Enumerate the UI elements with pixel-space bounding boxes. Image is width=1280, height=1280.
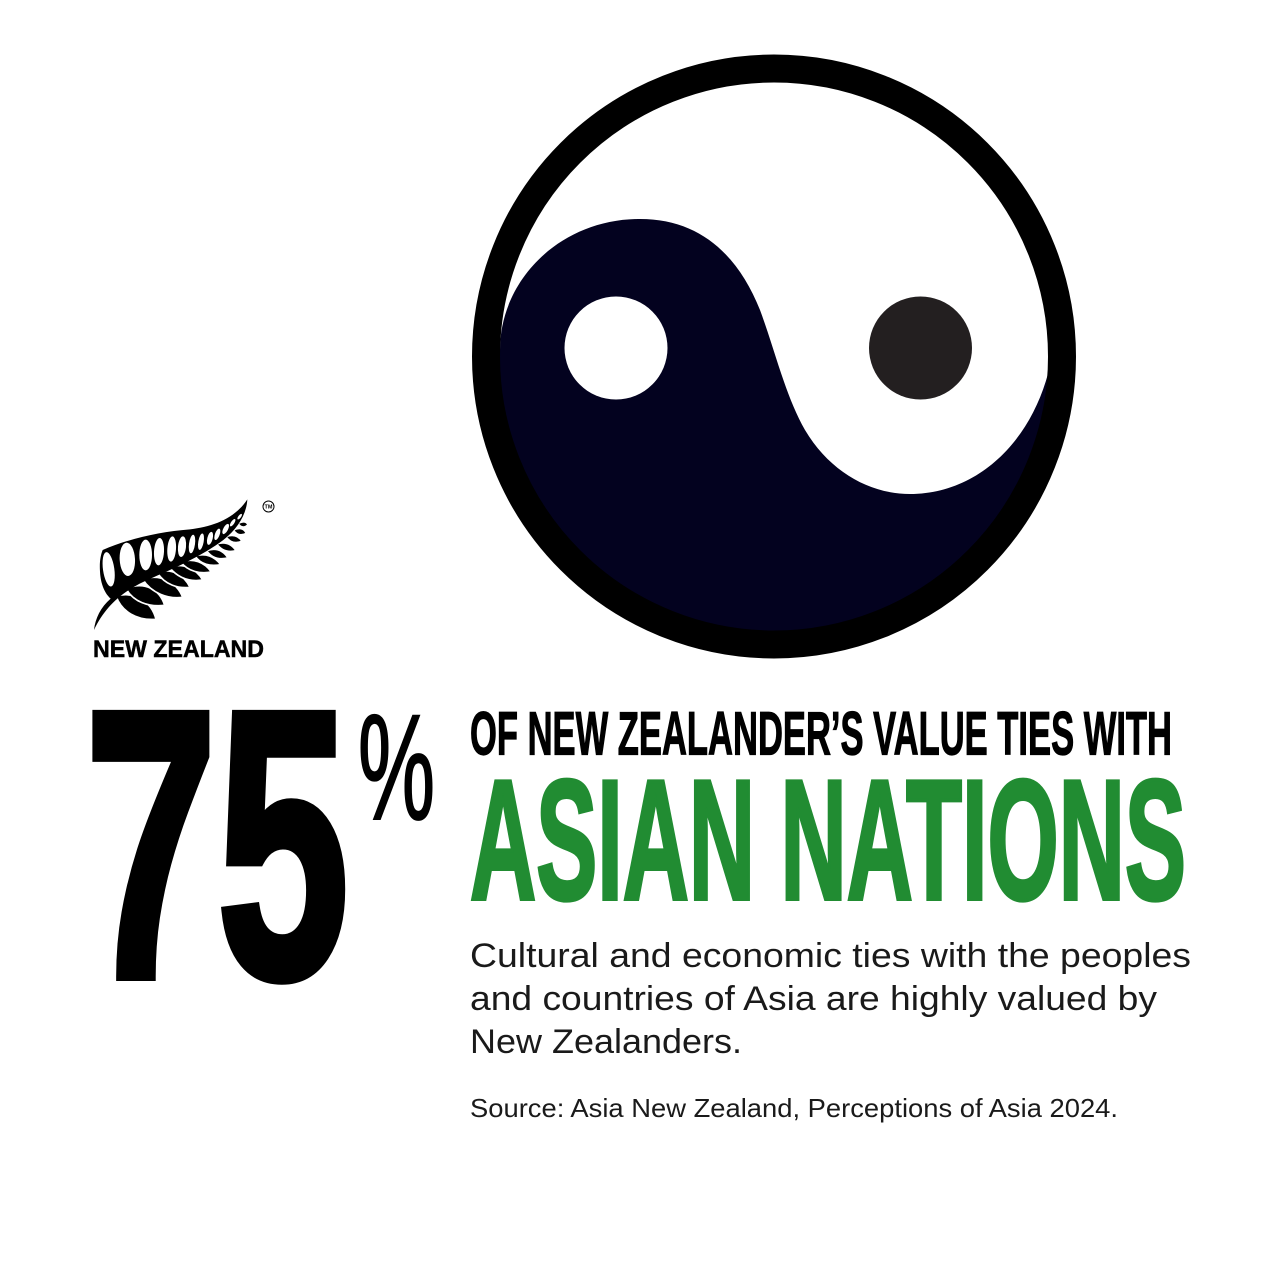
trademark mark: TM <box>265 504 273 510</box>
percent sign: % <box>358 683 435 851</box>
logo: silver fern New Zealand <box>93 499 274 663</box>
body text: New Zealanders. <box>470 1023 742 1061</box>
fern stem and upper band <box>94 499 247 630</box>
icon: yin-yang circle <box>486 68 1062 644</box>
body text <box>470 937 1191 1061</box>
number 75: 75 <box>85 632 349 1058</box>
source note: Source: Asia New Zealand, Perceptions of Asia 2024. <box>470 1093 1118 1123</box>
body text: and countries of Asia are highly valued by <box>470 980 1157 1018</box>
fern lower leaflets <box>116 522 248 619</box>
big statistic 75 percent <box>85 632 435 1058</box>
logo wordmark: NEW ZEALAND <box>93 636 264 663</box>
dark dot <box>869 296 972 400</box>
outer black ring <box>486 68 1062 644</box>
body text: Cultural and economic ties with the peoples <box>470 937 1191 975</box>
white dot <box>564 296 668 400</box>
icon: silver fern <box>94 499 248 630</box>
fern white lobes <box>101 513 243 587</box>
trademark mark <box>263 501 274 512</box>
yin-yang dark navy swirl <box>499 219 1049 635</box>
